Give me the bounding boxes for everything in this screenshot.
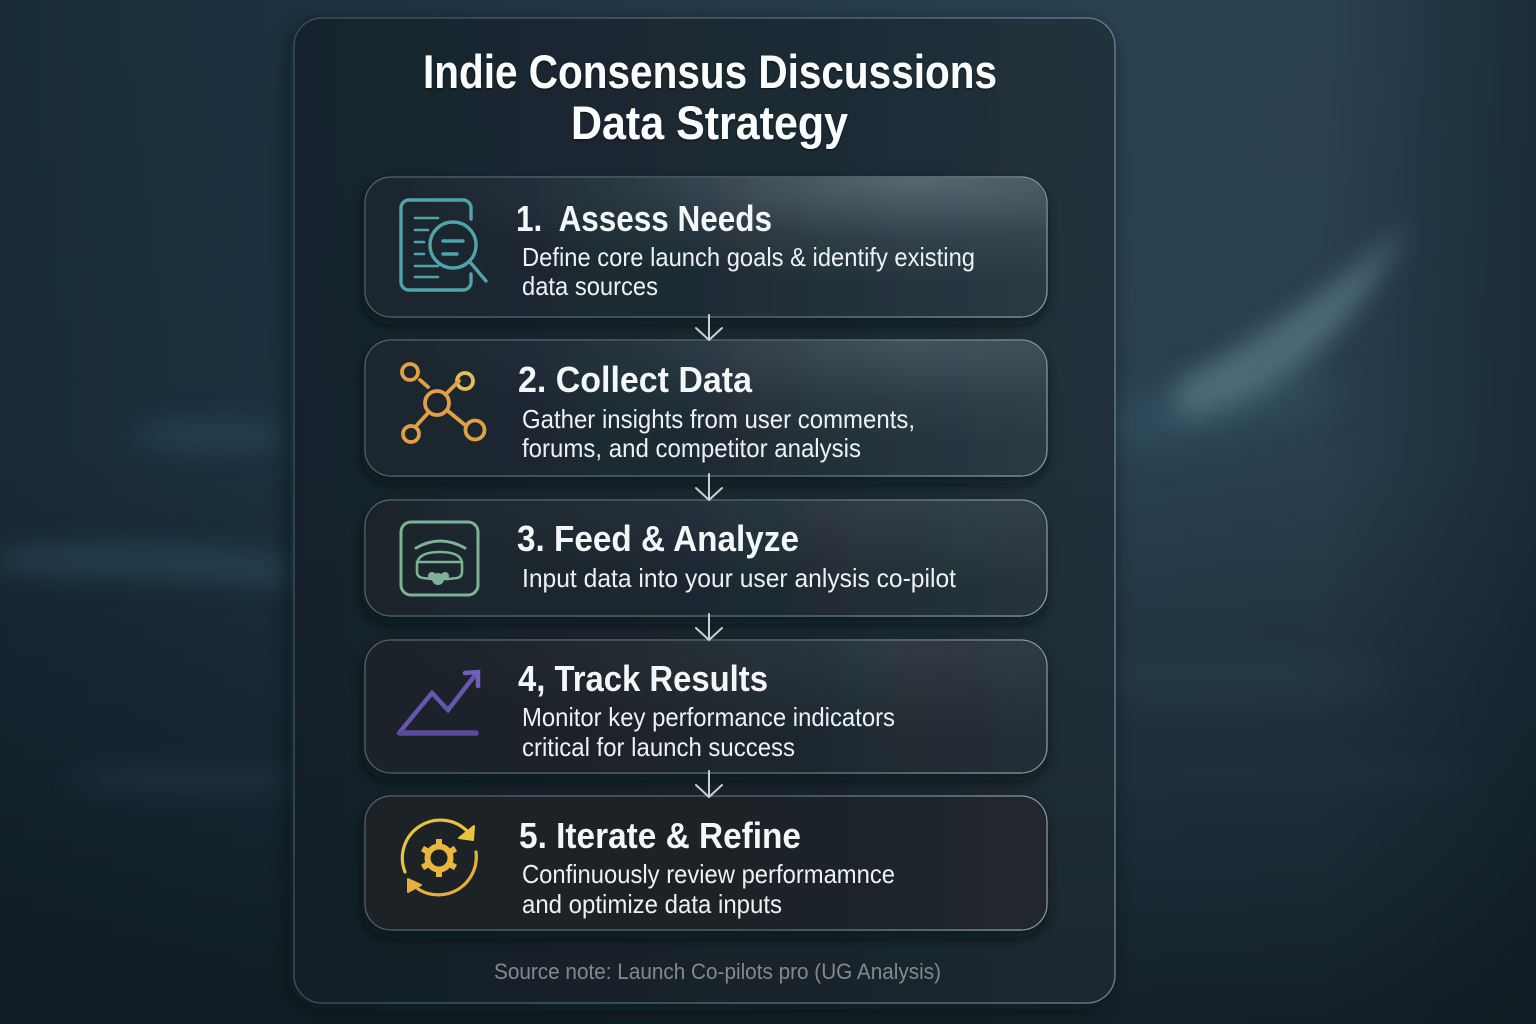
source note: Source note: Launch Co-pilots pro (UG Analysis) (494, 959, 941, 984)
step 1 description: data sources (522, 271, 658, 301)
step 2 card: collect data (365, 340, 1047, 476)
step 4 heading: 4, Track Results (518, 658, 768, 699)
title: Data Strategy (571, 96, 848, 149)
step 5 description: Confinuously review performamnce (522, 859, 895, 889)
icon: document with magnifier (401, 200, 486, 290)
step 2 description: forums, and competitor analysis (522, 433, 861, 463)
step 1 card: assess needs (365, 177, 1047, 317)
step 2 heading: 2. Collect Data (518, 359, 753, 400)
icon: co-pilot device (401, 522, 478, 595)
step 5 description (522, 859, 895, 919)
step 4 description: Monitor key performance indicators (522, 702, 895, 732)
step 5 heading: 5. Iterate & Refine (519, 815, 801, 856)
step 5 description: and optimize data inputs (522, 889, 782, 919)
step 4 description (522, 702, 895, 762)
arrow: step 4 to 5 (696, 771, 722, 797)
step 3 description: Input data into your user anlysis co-pilot (522, 563, 957, 593)
step 4 card: track results (365, 640, 1047, 773)
arrow: step 3 to 4 (696, 614, 722, 640)
icon: connected nodes (402, 364, 484, 442)
panel: data strategy (294, 18, 1115, 1003)
step 1 description: Define core launch goals & identify existing (522, 242, 975, 272)
step 5 card: iterate and refine (365, 796, 1047, 930)
step 1 description (522, 242, 975, 301)
step 3 heading: 3. Feed & Analyze (517, 518, 799, 559)
step 4 description: critical for launch success (522, 732, 795, 762)
step 1 heading: 1. Assess Needs (516, 198, 772, 239)
arrow: step 1 to 2 (696, 315, 722, 340)
arrow: step 2 to 3 (696, 474, 722, 500)
title: Indie Consensus Discussions (423, 45, 997, 98)
step 3 card: feed and analyze (365, 500, 1047, 616)
icon: rising chart arrow (399, 672, 478, 733)
title (423, 45, 997, 149)
step 2 description (522, 404, 915, 463)
icon: gear with cycle arrows (402, 820, 476, 895)
step 2 description: Gather insights from user comments, (522, 404, 915, 434)
